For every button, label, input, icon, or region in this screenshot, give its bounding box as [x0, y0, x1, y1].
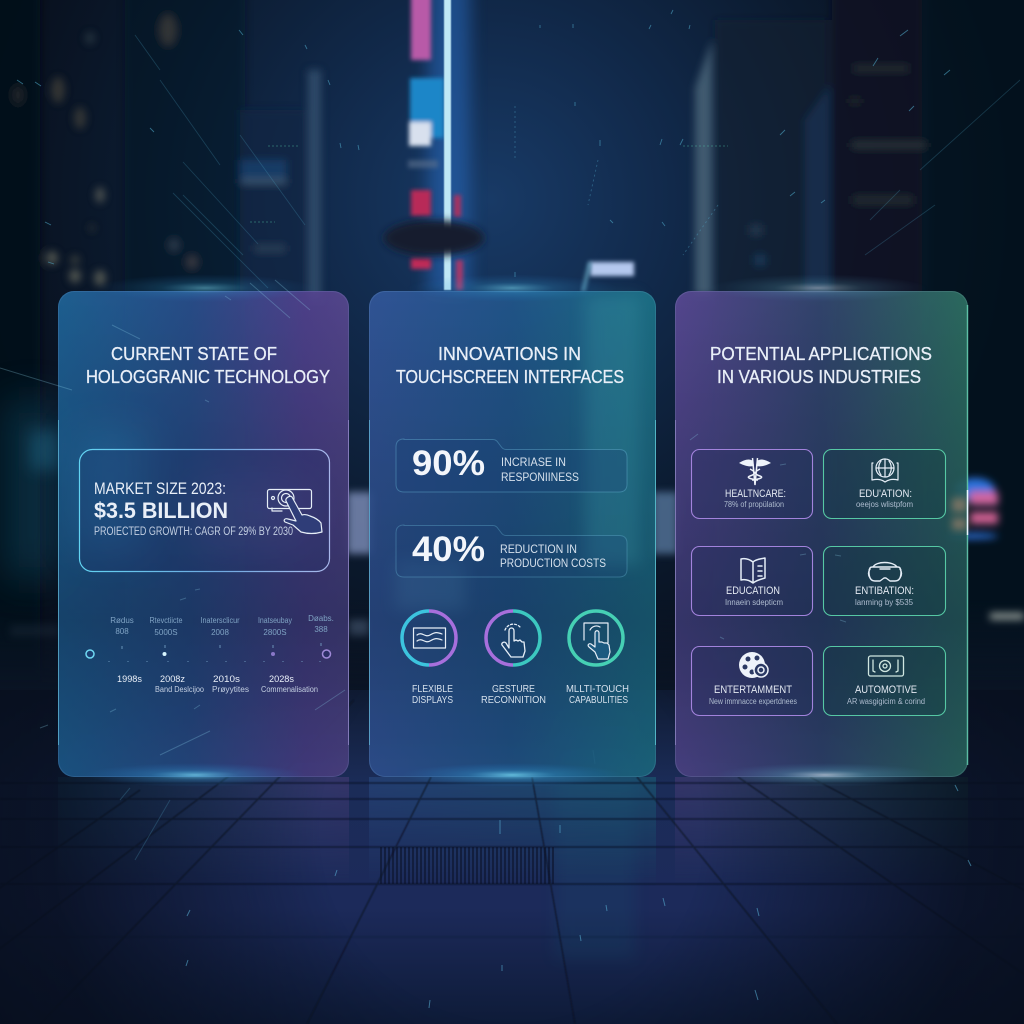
heading — [396, 344, 624, 387]
card: education top right: EDU'ATION: — [859, 488, 912, 500]
feature: multi-touch capabilities — [566, 611, 629, 706]
left side glow — [5, 400, 60, 637]
centre gap glows — [347, 492, 678, 636]
stat: 90%: RESPONIINESS — [501, 470, 579, 484]
icon: film reel — [739, 652, 768, 678]
timeline decades: 1998s — [117, 674, 142, 684]
icon: tapping hand — [502, 624, 525, 657]
card: entertainment: New immnacce expertdnees — [709, 697, 797, 706]
timeline decades: Prøyytites — [212, 685, 249, 694]
stat: 40%: 40% — [412, 530, 485, 569]
market size callout: PROIECTED GROWTH: CAGR OF 29% BY 2030 — [94, 526, 293, 538]
market size callout: MARKET SIZE 2023: — [94, 480, 226, 498]
card: automotive: AUTOMOTIVE — [855, 684, 917, 696]
timeline decades: Commenalisation — [261, 685, 318, 694]
feature: gesture recognition: GESTURE — [492, 683, 535, 695]
timeline upper labels: 5000S — [154, 628, 178, 637]
timeline decades: 2008z — [160, 674, 185, 684]
right buildings with dim windows — [695, 0, 1024, 680]
upper background streak specks — [17, 10, 1020, 288]
card: healthcare — [692, 450, 812, 518]
timeline upper labels: 2008 — [211, 628, 229, 637]
timeline — [86, 614, 334, 694]
heading: INNOVATIONS IN — [438, 344, 581, 364]
timeline decades: Band Deslcijoo — [155, 685, 204, 694]
card: healthcare: HEALTNCARE: — [725, 488, 786, 500]
feature: flexible displays — [402, 611, 456, 706]
heading: TOUCHSCREEN INTERFACES — [396, 367, 624, 387]
timeline upper labels: Døabs. — [308, 614, 334, 623]
stat: 40%: PRODUCTION COSTS — [500, 556, 606, 570]
icon: car dashboard — [868, 656, 904, 676]
panel: innovations in touchscreen interfaces — [369, 274, 656, 787]
heading — [710, 344, 932, 387]
card: entibation: lanming by $535 — [855, 598, 914, 607]
timeline upper labels: Inatseubay — [258, 616, 292, 625]
market size callout: $3.5 BILLION — [94, 498, 228, 523]
stat: 40% — [396, 525, 627, 577]
stat: 90%: 90% — [412, 444, 485, 483]
card: education middle left: Innaein sdepticm — [725, 598, 783, 607]
timeline upper labels: Rødus — [110, 616, 134, 625]
card: entibation: ENTIBATION: — [855, 585, 914, 597]
card: automotive — [824, 646, 946, 716]
background: blurred city night scene — [0, 0, 1024, 700]
stat: 40%: REDUCTION IN — [500, 542, 577, 556]
card: automotive: AR wasgigicim & corind — [847, 697, 925, 706]
panel: potential applications in various industries — [675, 274, 968, 787]
central neon beam and signs — [384, 0, 634, 292]
icon: VR headset — [868, 562, 902, 581]
card: entibation — [824, 546, 946, 616]
panel: current state of holographic technology — [58, 274, 349, 787]
left buildings with dim windows — [0, 0, 321, 680]
heading — [86, 344, 330, 387]
icon: multi-touch panel — [584, 623, 610, 659]
card: entertainment: ENTERTAMMENT — [714, 684, 792, 696]
card: education middle left — [692, 546, 812, 616]
floor with perspective tile grid — [58, 690, 955, 1024]
heading: IN VARIOUS INDUSTRIES — [717, 367, 921, 387]
feature: flexible displays: FLEXIBLE — [412, 683, 453, 695]
heading: POTENTIAL APPLICATIONS — [710, 344, 932, 364]
feature: gesture recognition — [481, 611, 546, 706]
feature: multi-touch capabilities: CAPABULITIES — [569, 694, 628, 706]
icon: projector touched by hand — [268, 490, 322, 534]
card: education top right — [824, 450, 946, 518]
timeline upper labels: Rtevctiicte — [150, 616, 183, 625]
heading: CURRENT STATE OF — [111, 344, 277, 364]
icon: open book — [741, 558, 765, 583]
right neon signs — [946, 478, 1024, 620]
card: healthcare: 78% of propülation — [724, 500, 784, 509]
feature: flexible displays: DISPLAYS — [412, 694, 453, 706]
timeline upper labels: 808 — [115, 627, 129, 636]
timeline upper labels: Inatersclicur — [200, 616, 240, 625]
icon: caduceus — [739, 458, 771, 485]
feature: gesture recognition: RECONNITION — [481, 694, 546, 706]
market size callout — [80, 450, 330, 572]
heading: HOLOGGRANIC TECHNOLOGY — [86, 367, 330, 387]
timeline decades: 2028s — [269, 674, 294, 684]
card: education middle left: EDUCATION — [726, 585, 780, 597]
feature: multi-touch capabilities: MLLTI-TOUCH — [566, 683, 629, 695]
icon: flexible screen — [414, 628, 446, 648]
timeline upper labels — [110, 614, 334, 637]
icon: globe book — [872, 459, 898, 482]
card: education top right: oeejos wlistpfom — [856, 500, 913, 509]
card: entertainment — [692, 646, 812, 716]
panel reflections — [93, 777, 942, 855]
floor light specks — [120, 750, 971, 1008]
foreground streak specks over panels — [0, 280, 846, 755]
timeline upper labels: 2800S — [263, 628, 287, 637]
stat: 90% — [396, 439, 627, 492]
timeline upper labels: 388 — [314, 625, 328, 634]
stat: 90%: INCRIASE IN — [501, 455, 566, 469]
timeline decades — [117, 674, 318, 694]
timeline decades: 2010s — [213, 674, 241, 684]
